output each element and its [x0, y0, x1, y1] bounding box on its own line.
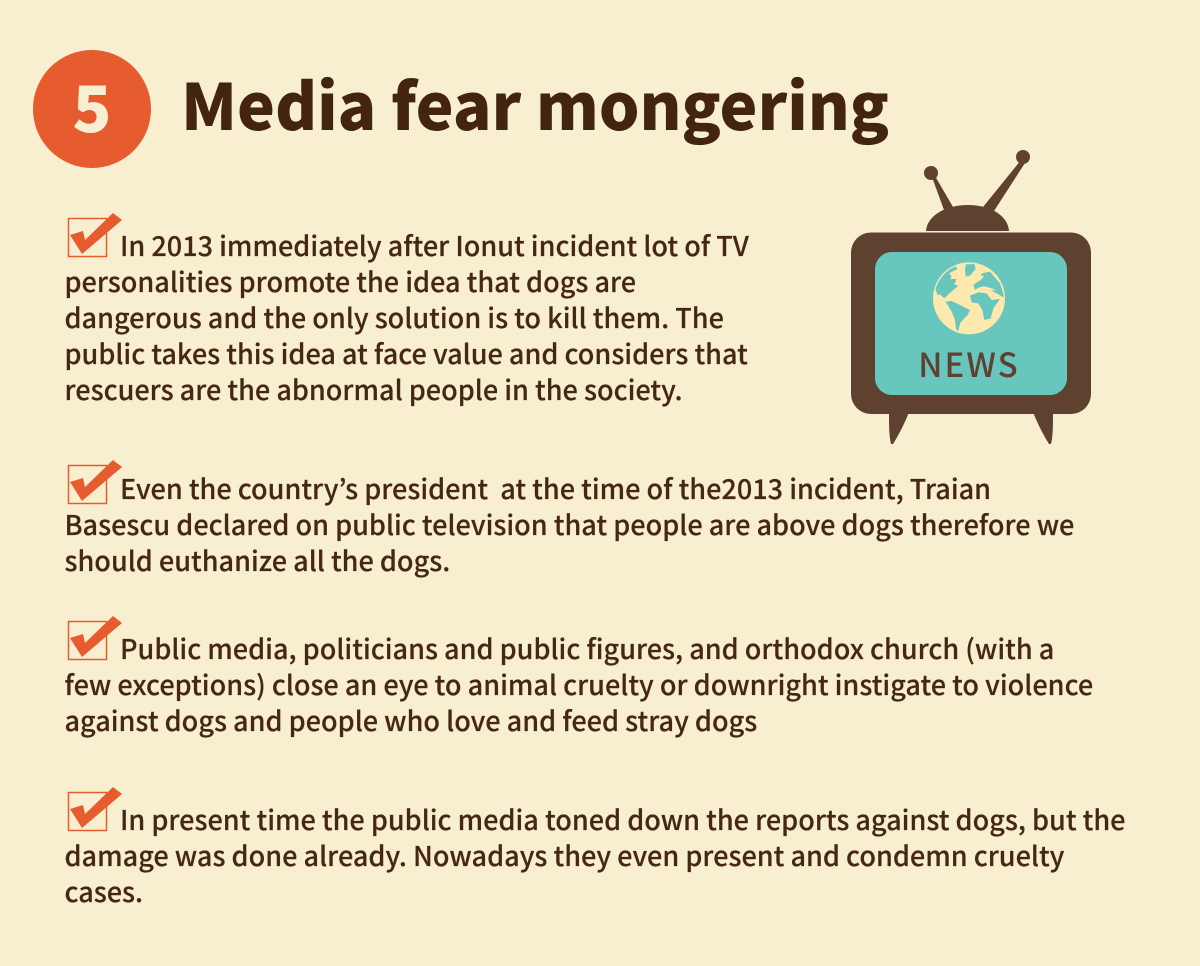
- icon: retro TV news: [851, 150, 1091, 444]
- text block: personalities promote the idea that dogs are: [64, 261, 636, 300]
- checklist item 4: [64, 787, 1125, 910]
- TV antenna: [924, 150, 1030, 231]
- text block: should euthanize all the dogs.: [64, 540, 450, 579]
- text block: public takes this idea at face value and considers that: [64, 333, 748, 372]
- text block: In 2013 immediately after Ionut incident lot of TV: [120, 225, 750, 264]
- title: Media fear mongering: [181, 57, 889, 149]
- text block: cases.: [64, 871, 143, 910]
- number badge: [33, 50, 151, 168]
- text block: Basescu declared on public television that people are above dogs therefore we: [64, 504, 1074, 543]
- icon: check mark: [68, 616, 122, 660]
- screen label: NEWS: [918, 339, 1020, 387]
- text block: In present time the public media toned down the reports against dogs, but the: [120, 799, 1125, 838]
- icon: check mark: [68, 213, 122, 256]
- text block: Public media, politicians and public figures, and orthodox church (with a: [120, 628, 1054, 667]
- icon: globe: [933, 262, 1005, 334]
- number badge: 5: [73, 59, 111, 151]
- TV body: [851, 232, 1091, 414]
- icon: check mark: [68, 460, 122, 504]
- TV screen: [875, 252, 1067, 395]
- icon: check mark: [68, 787, 122, 830]
- text block: damage was done already. Nowadays they even present and condemn cruelty: [64, 835, 1065, 874]
- checklist item 1: [64, 213, 750, 408]
- checklist item 2: [64, 460, 1074, 579]
- checklist item 3: [64, 616, 1093, 739]
- text block: rescuers are the abnormal people in the society.: [64, 369, 683, 408]
- TV legs: [889, 412, 1053, 444]
- text block: against dogs and people who love and feed stray dogs: [64, 700, 757, 739]
- text block: few exceptions) close an eye to animal cruelty or downright instigate to violence: [64, 664, 1093, 703]
- text block: dangerous and the only solution is to kill them. The: [64, 297, 724, 336]
- text block: Even the country’s president at the time of the2013 incident, Traian: [120, 468, 991, 507]
